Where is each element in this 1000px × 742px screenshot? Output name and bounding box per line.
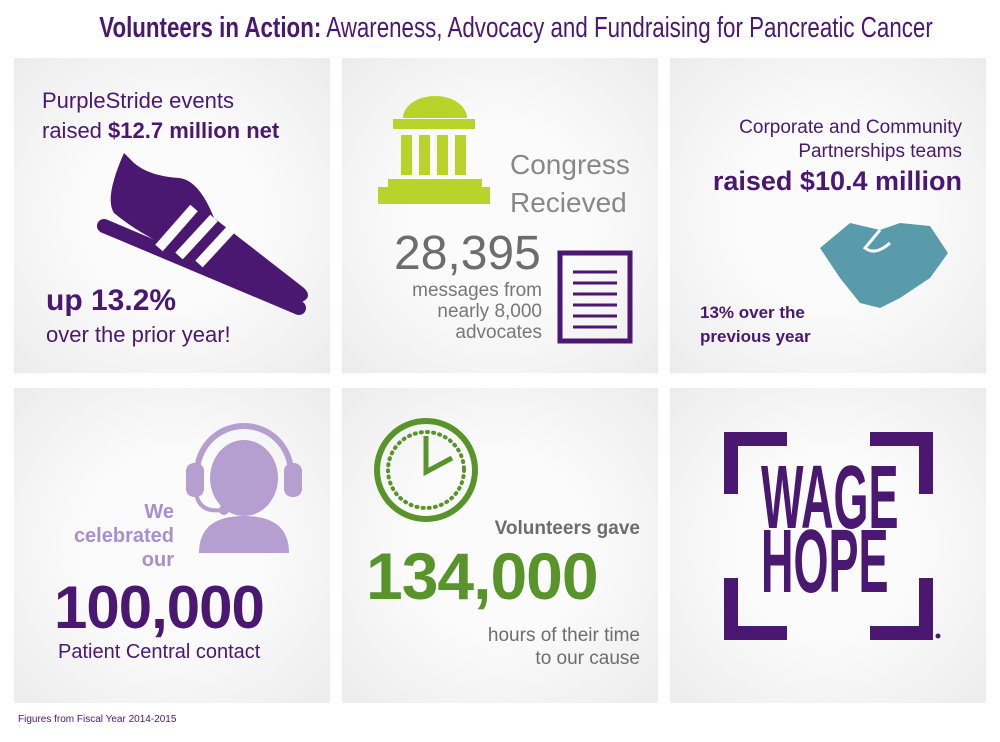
text: 13%: previous year xyxy=(700,327,811,346)
logo: wage hope text: HOPE xyxy=(761,512,889,612)
logo: wage hope text xyxy=(761,448,899,612)
text: up: up 13.2% xyxy=(46,284,176,317)
panel: corporate xyxy=(670,58,986,373)
text: 13% xyxy=(700,303,811,346)
text: raised: raised $12.7 million net xyxy=(42,118,279,143)
panel: purplestride xyxy=(14,58,330,373)
text: messages: advocates xyxy=(455,322,542,343)
logo: brackets xyxy=(724,432,940,640)
icon: headset person xyxy=(186,423,302,553)
text: we celebrated xyxy=(74,501,174,571)
icon: document xyxy=(558,250,632,344)
text: we celebrated: We xyxy=(144,501,174,523)
text: corporate: Corporate and Community xyxy=(739,117,962,138)
text: 13%: 13% over the xyxy=(700,303,805,322)
text: congress received xyxy=(510,149,630,218)
text: raised xyxy=(42,88,279,143)
icon: shoe xyxy=(97,153,308,315)
text: patient central: Patient Central contact xyxy=(58,641,260,663)
text: congress received: Congress xyxy=(510,149,630,180)
text: we celebrated: celebrated xyxy=(74,525,174,547)
panel: congress xyxy=(342,58,658,373)
panel: volunteers xyxy=(342,388,658,703)
text: hours: hours of their time xyxy=(488,625,640,646)
text: volunteers gave: Volunteers gave xyxy=(495,518,640,539)
number: 134,000: 134,000 xyxy=(366,539,598,613)
text: raised 10.4: raised $10.4 million xyxy=(713,166,962,196)
text: hours xyxy=(488,625,640,669)
number: 100,000: 100,000 xyxy=(54,574,264,641)
text: over: over the prior year! xyxy=(46,322,231,347)
text: corporate xyxy=(739,117,962,162)
text: messages: messages from xyxy=(412,280,542,301)
text: messages: nearly 8,000 xyxy=(437,301,542,322)
panel: patient central xyxy=(14,388,330,703)
panel: wage hope logo xyxy=(670,388,986,703)
text: hours: to our cause xyxy=(535,648,640,669)
title: Volunteers in Action: Awareness, Advocacy and Fundraising for Pancreatic Cancer xyxy=(99,12,933,44)
icon: handshake xyxy=(820,223,948,308)
text: corporate: Partnerships teams xyxy=(798,141,962,162)
text: messages xyxy=(412,280,542,343)
logo: wage hope text: WAGE xyxy=(761,448,899,548)
text: congress received: Recieved xyxy=(510,187,627,218)
icon: capitol xyxy=(378,96,490,204)
number: 28,395: 28,395 xyxy=(394,227,541,280)
icon: clock xyxy=(374,418,478,522)
text: raised: PurpleStride events xyxy=(42,88,234,113)
text: we celebrated: our xyxy=(142,549,174,571)
footnote: Figures from Fiscal Year 2014-2015 xyxy=(18,714,176,725)
